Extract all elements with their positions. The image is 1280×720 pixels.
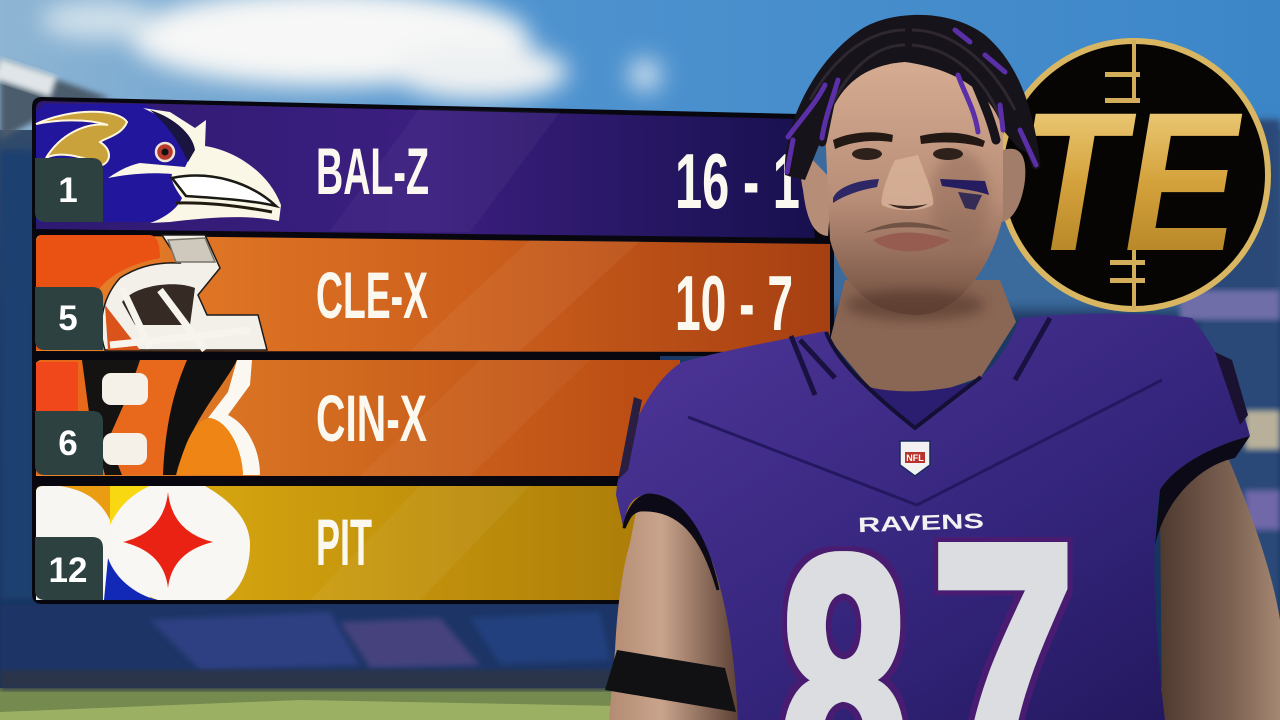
hair — [785, 15, 1040, 180]
jersey wordmark: RAVENS — [858, 510, 984, 537]
seed badge 5: 5 — [58, 299, 78, 338]
record: 10 - 7 — [675, 259, 793, 347]
seed badge 12 — [35, 537, 103, 600]
team name: BAL-Z — [316, 134, 429, 208]
head — [800, 58, 1025, 320]
team name: PIT — [316, 505, 372, 579]
mouth — [873, 232, 950, 251]
armband — [605, 650, 736, 712]
scoreboard backing — [32, 97, 834, 604]
nose — [882, 155, 933, 210]
jersey number — [779, 464, 1076, 720]
panel: Pittsburgh row — [35, 486, 680, 600]
logo: TE gold circle badge: TE — [1020, 71, 1242, 292]
NFL shield — [900, 441, 930, 476]
seed badge 1: 1 — [58, 171, 78, 210]
panel: Cleveland row — [35, 235, 830, 352]
seed badge 6: 6 — [58, 424, 78, 463]
record: 16 - 1 — [675, 137, 800, 225]
jersey — [616, 314, 1250, 720]
seed badge 1 — [35, 158, 103, 222]
seed badge 5 — [35, 287, 103, 350]
team name: CIN-X — [316, 381, 427, 455]
seed badge 12: 12 — [49, 551, 87, 590]
left arm — [609, 506, 740, 720]
icon: bengals logo — [36, 360, 260, 475]
icon: browns helmet — [36, 235, 267, 350]
right arm — [1160, 460, 1280, 720]
team name: CLE-X — [316, 258, 428, 332]
panel: Cincinnati row — [35, 360, 680, 476]
eyebrows and eyes — [833, 132, 893, 149]
neck — [830, 280, 1016, 400]
seed badge 6 — [35, 411, 103, 475]
player figure — [605, 15, 1280, 720]
eye black — [833, 179, 879, 203]
icon: ravens logo — [36, 104, 281, 223]
icon: steelers logo — [36, 486, 250, 600]
NFL shield: NFL — [906, 453, 924, 463]
panel: Baltimore row — [35, 101, 815, 238]
